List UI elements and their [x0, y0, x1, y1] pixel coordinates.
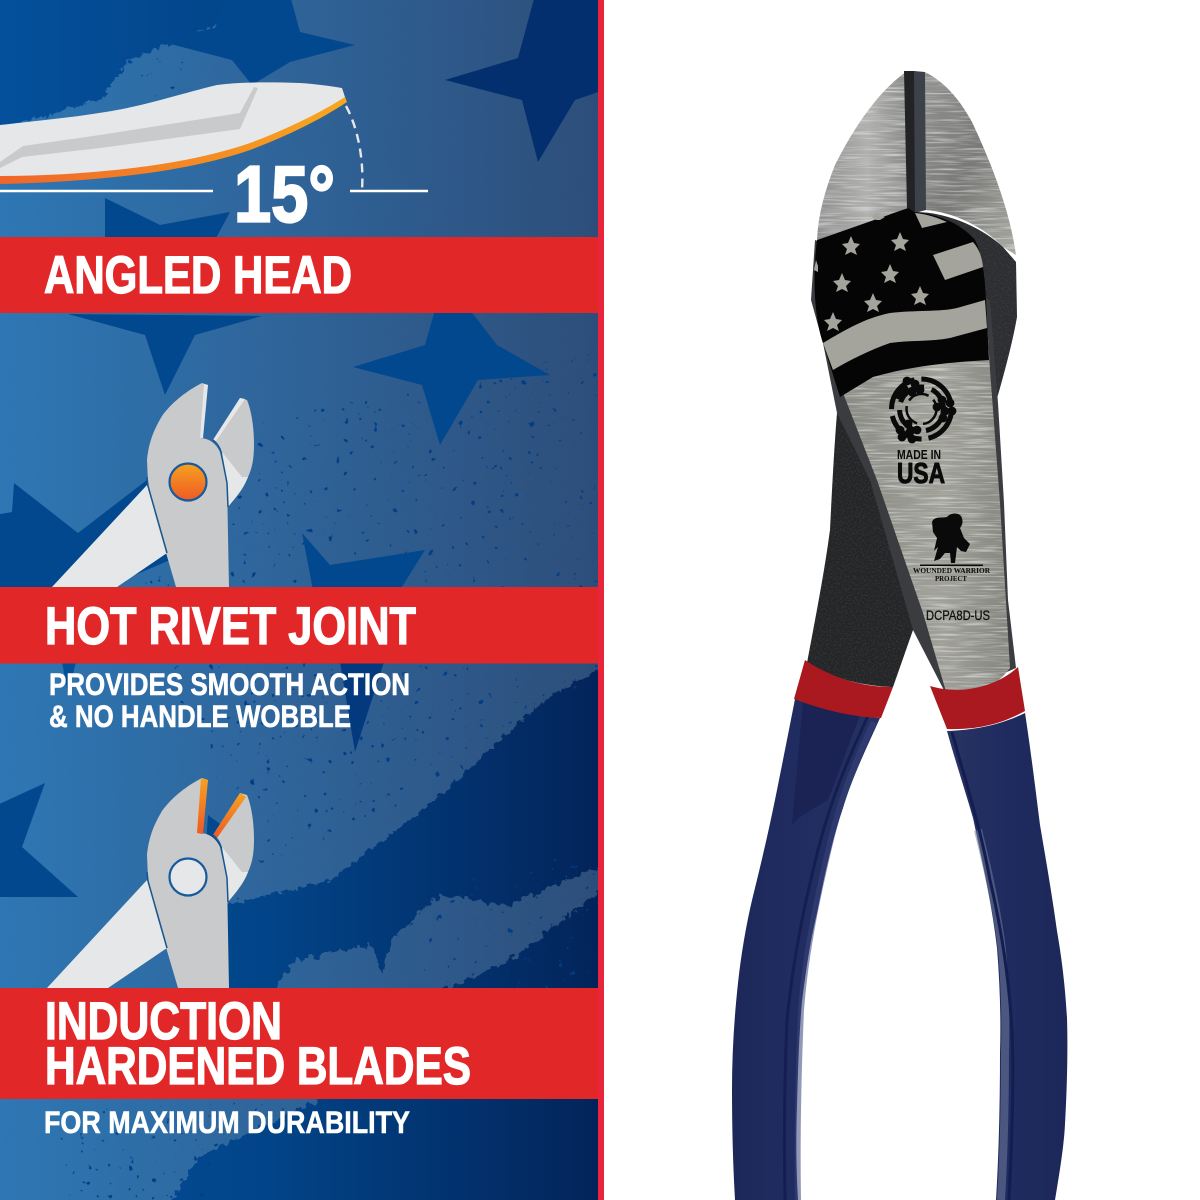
- text: made in: MADE IN: [897, 448, 941, 462]
- rivet: [170, 464, 206, 500]
- flag etching: [814, 208, 989, 397]
- heading: hardened blades line: HARDENED BLADES: [45, 1037, 471, 1096]
- panel: blue feature background: [0, 0, 620, 1200]
- text: blade description: FOR MAXIMUM DURABILITY: [44, 1104, 410, 1140]
- text: project: PROJECT: [935, 574, 967, 583]
- banner: hot rivet joint: [0, 587, 598, 664]
- right handle crease: [952, 732, 1013, 1200]
- icon: hot rivet pliers: [52, 383, 254, 587]
- left handle inner highlight: [798, 722, 874, 1200]
- collar: right: [930, 667, 1025, 729]
- hardened edges: [197, 778, 208, 834]
- handle: right: [947, 713, 1067, 1200]
- text: usa: USA: [897, 458, 945, 490]
- product photo: diagonal cutting pliers: [732, 71, 1067, 1200]
- icon: induction hardened pliers: [47, 778, 254, 988]
- right handle inner highlight: [978, 830, 1005, 1200]
- angle value: 15°: [234, 150, 335, 238]
- heading: angled head: ANGLED HEAD: [44, 246, 352, 305]
- angle arc dashed: [346, 106, 362, 190]
- illustration: angled head blade: [0, 82, 347, 184]
- icon: soldier silhouette: [920, 513, 983, 566]
- text: hot rivet description line 2: & NO HANDLE WOBBLE: [49, 698, 351, 734]
- left handle crease: [784, 716, 868, 1200]
- text: model number: DCPA8D-US: [926, 608, 990, 623]
- cutting head slot bevel: [914, 71, 926, 213]
- angle baseline right: [350, 190, 428, 192]
- cutting head right face: [925, 72, 1016, 255]
- back jaw right side: [915, 212, 1017, 410]
- handle: left: [732, 699, 880, 1200]
- left handle shadow: [792, 702, 860, 825]
- text: wounded warrior: WOUNDED WARRIOR: [913, 566, 991, 575]
- angle baseline left: [0, 190, 213, 192]
- text: hot rivet description line 1: PROVIDES SMOOTH ACTION: [49, 666, 410, 702]
- front shank dark bevel: [811, 240, 1016, 698]
- cutting head centre slot: [904, 71, 915, 212]
- rivet: [170, 858, 206, 896]
- cutting head left face: [817, 72, 908, 240]
- heading: hot rivet joint: HOT RIVET JOINT: [45, 597, 416, 656]
- banner: induction hardened blades: [0, 988, 598, 1099]
- banner: angled head: [0, 237, 598, 313]
- red divider stripe: [598, 0, 604, 1200]
- back jaw and shank: [807, 413, 925, 687]
- front shank steel: [843, 290, 1010, 695]
- wire logo: [892, 377, 956, 443]
- heading: induction line: INDUCTION: [45, 992, 282, 1051]
- collar: left: [794, 660, 893, 718]
